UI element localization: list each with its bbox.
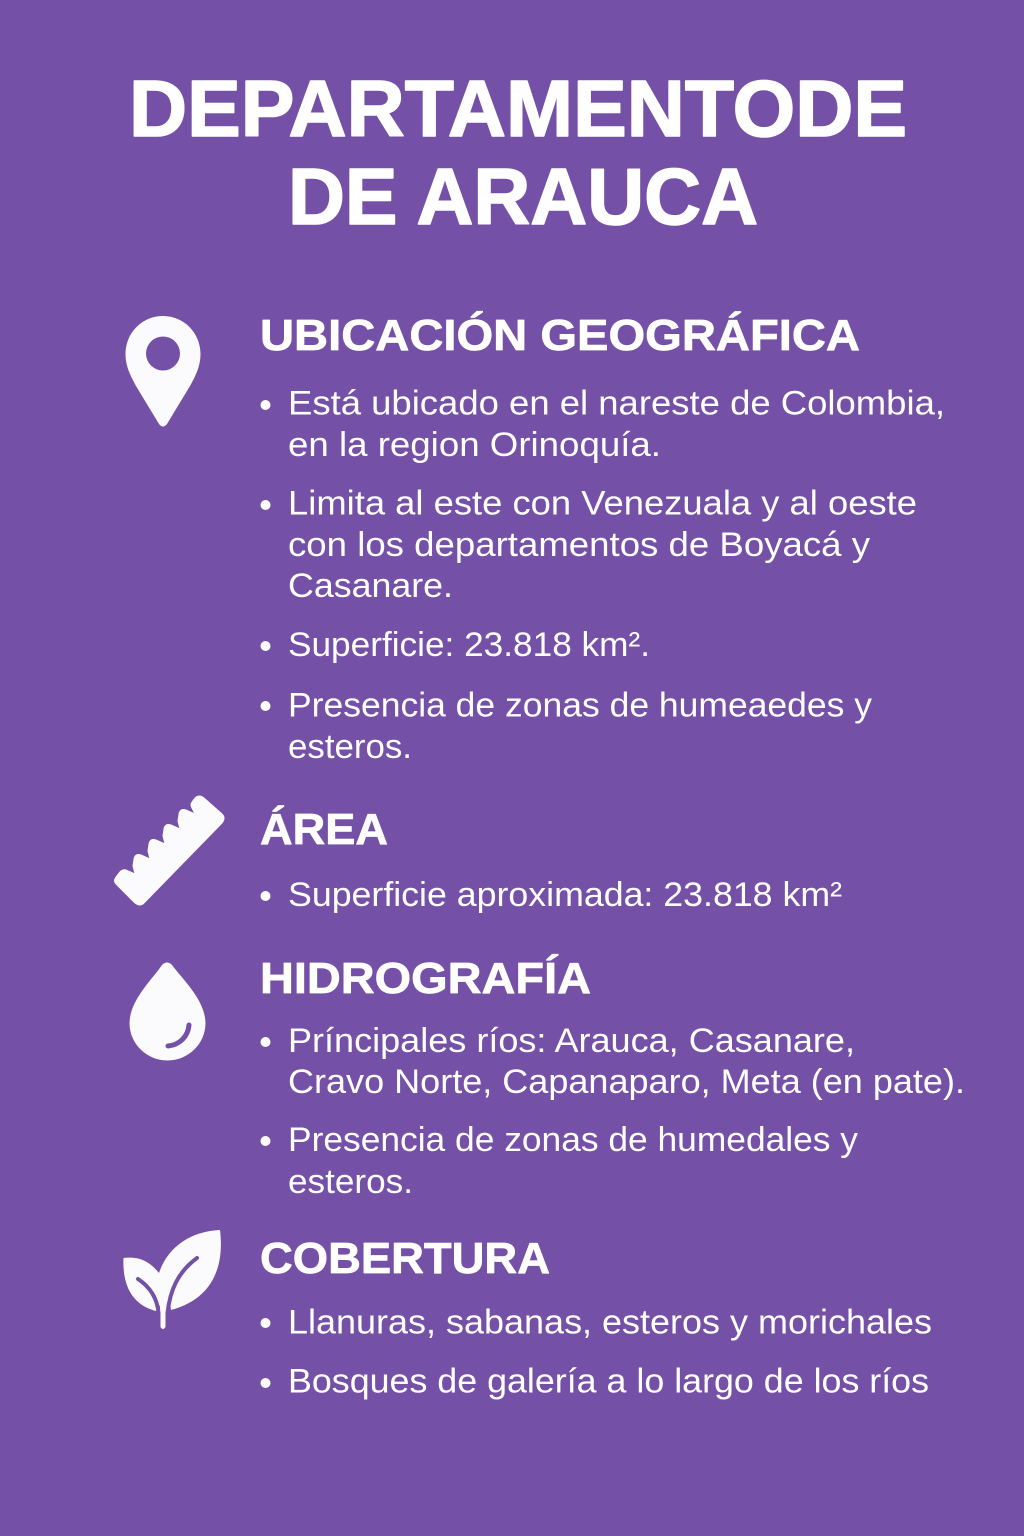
list: hidrografía [260, 1022, 965, 1201]
list: ubicación: Limita al este con Venezuala y al oeste [288, 484, 917, 522]
list: ubicación: Presencia de zonas de humeaedes y [288, 686, 873, 724]
list: cobertura: Llanuras, sabanas, esteros y morichales [288, 1304, 932, 1342]
list: hidrografía: Presencia de zonas de humedales y [288, 1121, 859, 1159]
panel: área [114, 796, 842, 914]
list: ubicación: Superficie: 23.818 km². [288, 626, 650, 664]
panel: cobertura [123, 1230, 932, 1400]
list: ubicación: Está ubicado en el nareste de Colombia, [288, 384, 945, 422]
panel: hidrografía [130, 953, 965, 1201]
title [129, 64, 907, 241]
heading: ubicación geográfica: UBICACIÓN GEOGRÁFICA [260, 310, 860, 360]
list: cobertura [260, 1304, 932, 1400]
heading: hidrografía: HIDROGRAFÍA [260, 953, 591, 1003]
list: ubicación: Casanare. [288, 567, 453, 605]
list: ubicación: esteros. [288, 728, 412, 766]
icon: water drop [130, 962, 206, 1060]
list: ubicación [260, 384, 945, 766]
list: hidrografía: Cravo Norte, Capanaparo, Meta (en pate). [288, 1063, 965, 1101]
title: DE ARAUCA [288, 152, 758, 241]
list: hidrografía: esteros. [288, 1163, 413, 1201]
list: área: Superficie aproximada: 23.818 km² [288, 876, 842, 914]
list: ubicación: en la region Orinoquía. [288, 426, 661, 464]
list: hidrografía: Príncipales ríos: Arauca, Casanare, [288, 1022, 855, 1060]
heading: cobertura: COBERTURA [260, 1234, 550, 1283]
panel: ubicación geográfica [126, 310, 945, 766]
list: cobertura: Bosques de galería a lo largo de los ríos [288, 1362, 929, 1400]
icon: ruler [114, 796, 224, 905]
list: ubicación: con los departamentos de Boyacá y [288, 526, 871, 564]
heading: área: ÁREA [260, 804, 388, 854]
icon: location pin [126, 316, 200, 426]
icon: leaf sprout [123, 1230, 221, 1329]
title: DEPARTAMENTODE [129, 64, 907, 153]
